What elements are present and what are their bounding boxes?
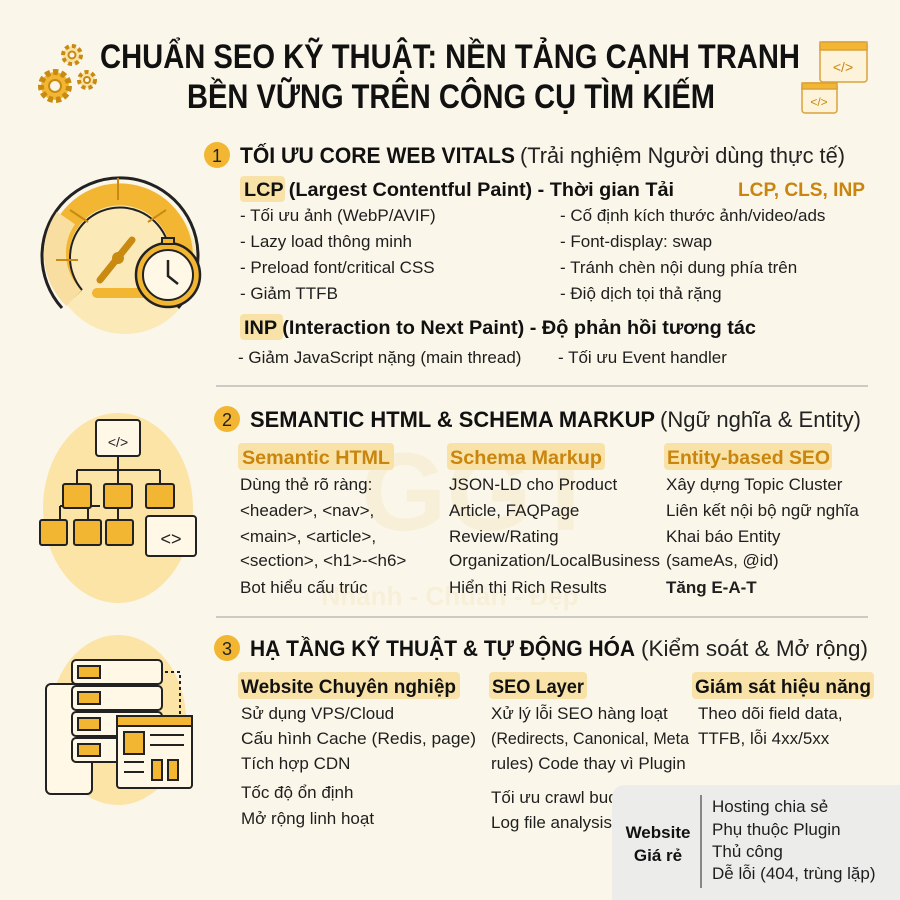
column: SEO Layer: Xử lý lỗi SEO hàng loạt: [491, 704, 668, 723]
column: Semantic HTML: <main>, <article>,: [240, 527, 376, 546]
LCP subheading: [240, 176, 865, 202]
title: [100, 38, 800, 116]
watermark: GGT: [361, 431, 599, 554]
section 2 heading: [214, 406, 861, 432]
LCP bullets: - Cố định kích thước ảnh/video/ads: [560, 206, 825, 225]
section 2 heading: 2: [222, 410, 232, 430]
icon: sitemap: </>: [108, 434, 128, 450]
INP bullets: [238, 348, 727, 367]
column: Semantic HTML: Semantic HTML: [242, 448, 390, 469]
column: Schema Markup: Hiển thị Rich Results: [449, 578, 607, 597]
section 3 heading: 3: [222, 639, 232, 659]
icon: speed gauge: [42, 178, 200, 334]
LCP bullets: - Lazy load thông minh: [240, 232, 412, 251]
LCP bullets: - Preload font/critical CSS: [240, 258, 435, 277]
INP bullets: - Giảm JavaScript nặng (main thread): [238, 348, 521, 367]
column: SEO Layer: SEO Layer: [492, 677, 585, 698]
section 2 heading: SEMANTIC HTML & SCHEMA MARKUP: [250, 407, 655, 432]
column: SEO Layer: [489, 672, 690, 832]
column: Schema Markup: Organization/LocalBusiness: [449, 551, 660, 570]
column: Giám sát hiệu năng: Giám sát hiệu năng: [695, 677, 871, 698]
title: CHUẨN SEO KỸ THUẬT: NỀN TẢNG CẠNH TRANH: [100, 38, 800, 76]
icon: servers: [46, 635, 192, 805]
column: Entity-based SEO: Xây dựng Topic Cluster: [666, 475, 843, 494]
column: Schema Markup: Review/Rating: [449, 527, 559, 546]
column: Entity-based SEO: Liên kết nội bộ ngữ nghĩa: [666, 501, 859, 520]
column: Website Chuyên nghiệp: Tích hợp CDN: [241, 754, 350, 773]
column: SEO Layer: rules) Code thay vì Plugin: [491, 754, 686, 773]
column: Giám sát hiệu năng: Theo dõi field data,: [698, 704, 843, 723]
column: Schema Markup: JSON-LD cho Product: [449, 475, 617, 494]
column: Semantic HTML: <header>, <nav>,: [240, 501, 374, 520]
callout: Website giá rẻ: Hosting chia sẻ: [712, 797, 828, 816]
callout: Website giá rẻ: Thủ công: [712, 842, 783, 861]
column: Website Chuyên nghiệp: Mở rộng linh hoạt: [241, 809, 374, 828]
section 1 heading: [204, 142, 845, 168]
section 3 heading: [214, 635, 868, 661]
section 3 heading: (Kiểm soát & Mở rộng): [641, 636, 868, 661]
column: Website Chuyên nghiệp: Tốc độ ổn định: [241, 783, 353, 802]
title: BỀN VỮNG TRÊN CÔNG CỤ TÌM KIẾM: [187, 77, 715, 116]
column: Semantic HTML: <section>, <h1>-<h6>: [240, 551, 406, 570]
section 1 heading: 1: [212, 146, 222, 166]
LCP bullets: - Giảm TTFB: [240, 284, 338, 303]
column: Semantic HTML: [238, 443, 406, 597]
column: Semantic HTML: Dùng thẻ rõ ràng:: [240, 475, 372, 494]
column: SEO Layer: (Redirects, Canonical, Meta: [491, 729, 690, 748]
LCP bullets: - Điộ dịch tọi thả rặng: [560, 284, 722, 303]
section 3 heading: HẠ TẦNG KỸ THUẬT & TỰ ĐỘNG HÓA: [250, 636, 635, 661]
watermark: Nhanh - Chuẩn - Đẹp: [321, 581, 579, 611]
column: Entity-based SEO: Entity-based SEO: [667, 448, 830, 469]
callout: Website giá rẻ: Giá rẻ: [634, 846, 682, 865]
LCP bullets: - Font-display: swap: [560, 232, 712, 251]
column: Giám sát hiệu năng: [692, 672, 874, 748]
column: Website Chuyên nghiệp: [238, 672, 476, 828]
INP subheading: INP (Interaction to Next Paint) - Độ phản hồi tương tác: [244, 318, 756, 339]
watermark: [321, 431, 599, 611]
column: Entity-based SEO: Khai báo Entity: [666, 527, 781, 546]
section 1 heading: TỐI ƯU CORE WEB VITALS: [240, 142, 515, 168]
icon: sitemap: [40, 413, 196, 603]
icon: code windows: </>: [833, 59, 853, 75]
column: Schema Markup: Article, FAQPage: [449, 501, 579, 520]
icon: gears: [41, 46, 95, 100]
INP bullets: - Tối ưu Event handler: [558, 348, 727, 367]
column: Schema Markup: Schema Markup: [450, 448, 602, 469]
column: Entity-based SEO: Tăng E-A-T: [666, 578, 757, 597]
column: Giám sát hiệu năng: TTFB, lỗi 4xx/5xx: [698, 729, 830, 748]
callout: Website giá rẻ: Dễ lỗi (404, trùng lặp): [712, 864, 875, 883]
section 2 heading: (Ngữ nghĩa & Entity): [660, 407, 861, 432]
LCP subheading: LCP, CLS, INP: [738, 180, 865, 201]
LCP bullets: [240, 206, 825, 303]
LCP bullets: - Tối ưu ảnh (WebP/AVIF): [240, 206, 436, 225]
LCP bullets: - Tránh chèn nội dung phía trên: [560, 258, 797, 277]
LCP subheading: LCP (Largest Contentful Paint) - Thời gian Tải: [244, 180, 674, 201]
callout: Website giá rẻ: [612, 785, 900, 900]
column: Entity-based SEO: [664, 443, 859, 597]
column: Schema Markup: [447, 443, 660, 597]
column: Website Chuyên nghiệp: Website Chuyên nghiệp: [241, 677, 456, 698]
icon: code windows: [802, 42, 867, 113]
column: Semantic HTML: Bot hiểu cấu trúc: [240, 578, 368, 597]
column: Entity-based SEO: (sameAs, @id): [666, 551, 779, 570]
icon: sitemap: <>: [160, 529, 182, 549]
icon: code windows: </>: [810, 95, 828, 109]
callout: Website giá rẻ: Phụ thuộc Plugin: [712, 820, 841, 839]
callout: Website giá rẻ: Website: [626, 823, 690, 842]
column: SEO Layer: Log file analysis: [491, 813, 612, 832]
section 1 heading: (Trải nghiệm Người dùng thực tế): [520, 143, 845, 168]
column: SEO Layer: Tối ưu crawl budget: [491, 788, 642, 807]
column: Website Chuyên nghiệp: Cấu hình Cache (Redis, page): [241, 729, 476, 748]
column: Website Chuyên nghiệp: Sử dụng VPS/Cloud: [241, 704, 394, 723]
